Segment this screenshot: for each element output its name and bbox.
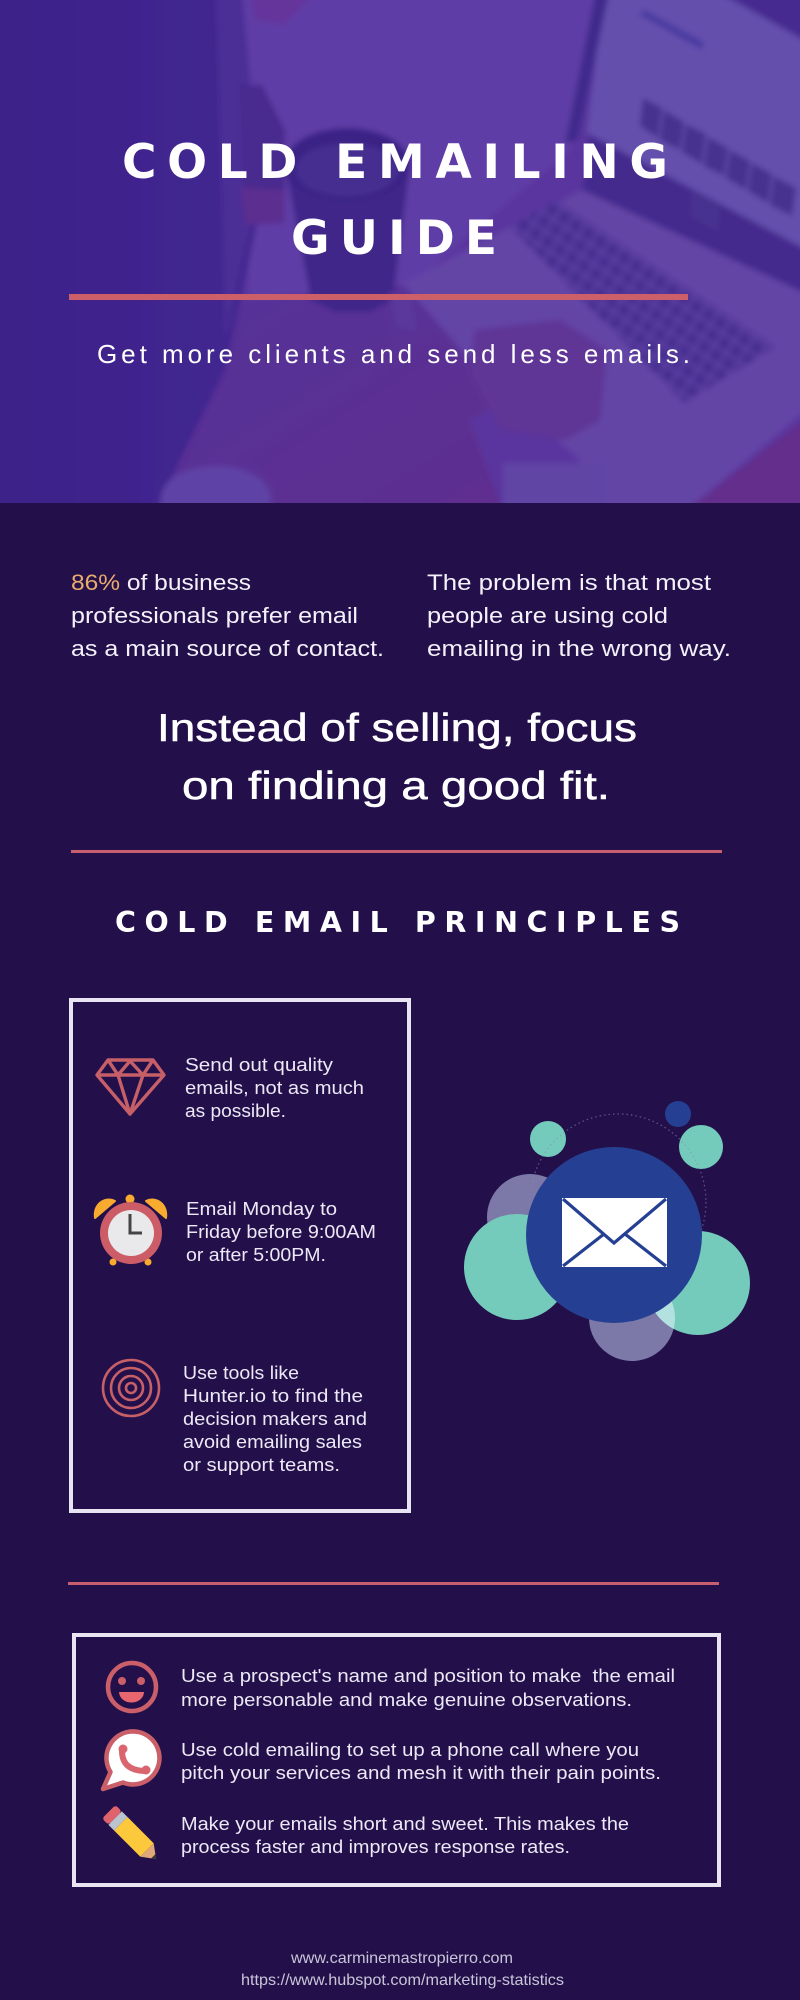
title — [122, 135, 668, 266]
text: quality emails: as possible. — [185, 1100, 286, 1121]
icon: smiley — [108, 1663, 156, 1711]
title: GUIDE — [291, 211, 497, 266]
text: phone call: Use cold emailing to set up a phone call where you — [181, 1739, 639, 1760]
text: phone call: pitch your services and mesh it with their pain points. — [181, 1762, 661, 1783]
text: send timing: or after 5:00PM. — [186, 1244, 326, 1265]
icon: phone speech bubble — [103, 1731, 159, 1789]
divider — [68, 1582, 719, 1585]
stat text: 86 percent — [71, 570, 384, 661]
footer sources: www.carminemastropierro.com — [290, 1950, 513, 1967]
text: personalise: more personable and make genuine observations. — [181, 1689, 632, 1710]
icon: target — [103, 1360, 159, 1416]
text: short emails: process faster and improves response rates. — [181, 1836, 570, 1857]
text: personalise: Use a prospect's name and position to make the email — [181, 1665, 675, 1686]
text: quality emails — [185, 1054, 364, 1121]
text: the problem: people are using cold — [427, 603, 668, 628]
text: send timing — [186, 1198, 376, 1265]
hero rule — [69, 294, 688, 300]
text: quality emails: emails, not as much — [185, 1077, 364, 1098]
title: COLD EMAILING — [122, 135, 668, 190]
text: tools: or support teams. — [183, 1454, 340, 1475]
illustration: envelope with bubbles — [464, 1101, 750, 1361]
text: tools: avoid emailing sales — [183, 1431, 362, 1452]
stat text: 86 percent: as a main source of contact. — [71, 636, 384, 661]
text: send timing: Email Monday to — [186, 1198, 337, 1219]
text: short emails — [181, 1813, 629, 1857]
section heading: COLD EMAIL PRINCIPLES — [115, 906, 680, 939]
stat text: 86 percent: 86% of business — [71, 570, 251, 595]
text: the problem: emailing in the wrong way. — [427, 636, 731, 661]
text: the problem — [427, 570, 731, 661]
footer sources: https://www.hubspot.com/marketing-statistics — [241, 1972, 564, 1989]
text: tools: Hunter.io to find the — [183, 1385, 363, 1406]
text: personalise — [181, 1665, 675, 1710]
text: tools: decision makers and — [183, 1408, 367, 1429]
footer sources — [241, 1950, 564, 1989]
panel: principles — [71, 1000, 409, 1511]
key statement: Instead of selling, focus — [157, 707, 637, 750]
icon: diamond — [97, 1060, 164, 1114]
text: send timing: Friday before 9:00AM — [186, 1221, 376, 1242]
icon: pencil — [102, 1805, 163, 1866]
text: tools: Use tools like — [183, 1362, 299, 1383]
text: phone call — [181, 1739, 661, 1783]
subtitle: Get more clients and send less emails. — [97, 339, 690, 369]
stat text: 86 percent: professionals prefer email — [71, 603, 358, 628]
text: tools — [183, 1362, 367, 1475]
panel: tips — [74, 1635, 719, 1885]
hero photo with purple overlay — [0, 0, 800, 533]
key statement: on finding a good fit. — [182, 765, 610, 808]
text: quality emails: Send out quality — [185, 1054, 334, 1075]
text: the problem: The problem is that most — [427, 570, 712, 595]
divider — [71, 850, 722, 853]
icon: alarm clock — [95, 1194, 166, 1266]
text: short emails: Make your emails short and sweet. This makes the — [181, 1813, 629, 1834]
key statement — [157, 707, 637, 808]
